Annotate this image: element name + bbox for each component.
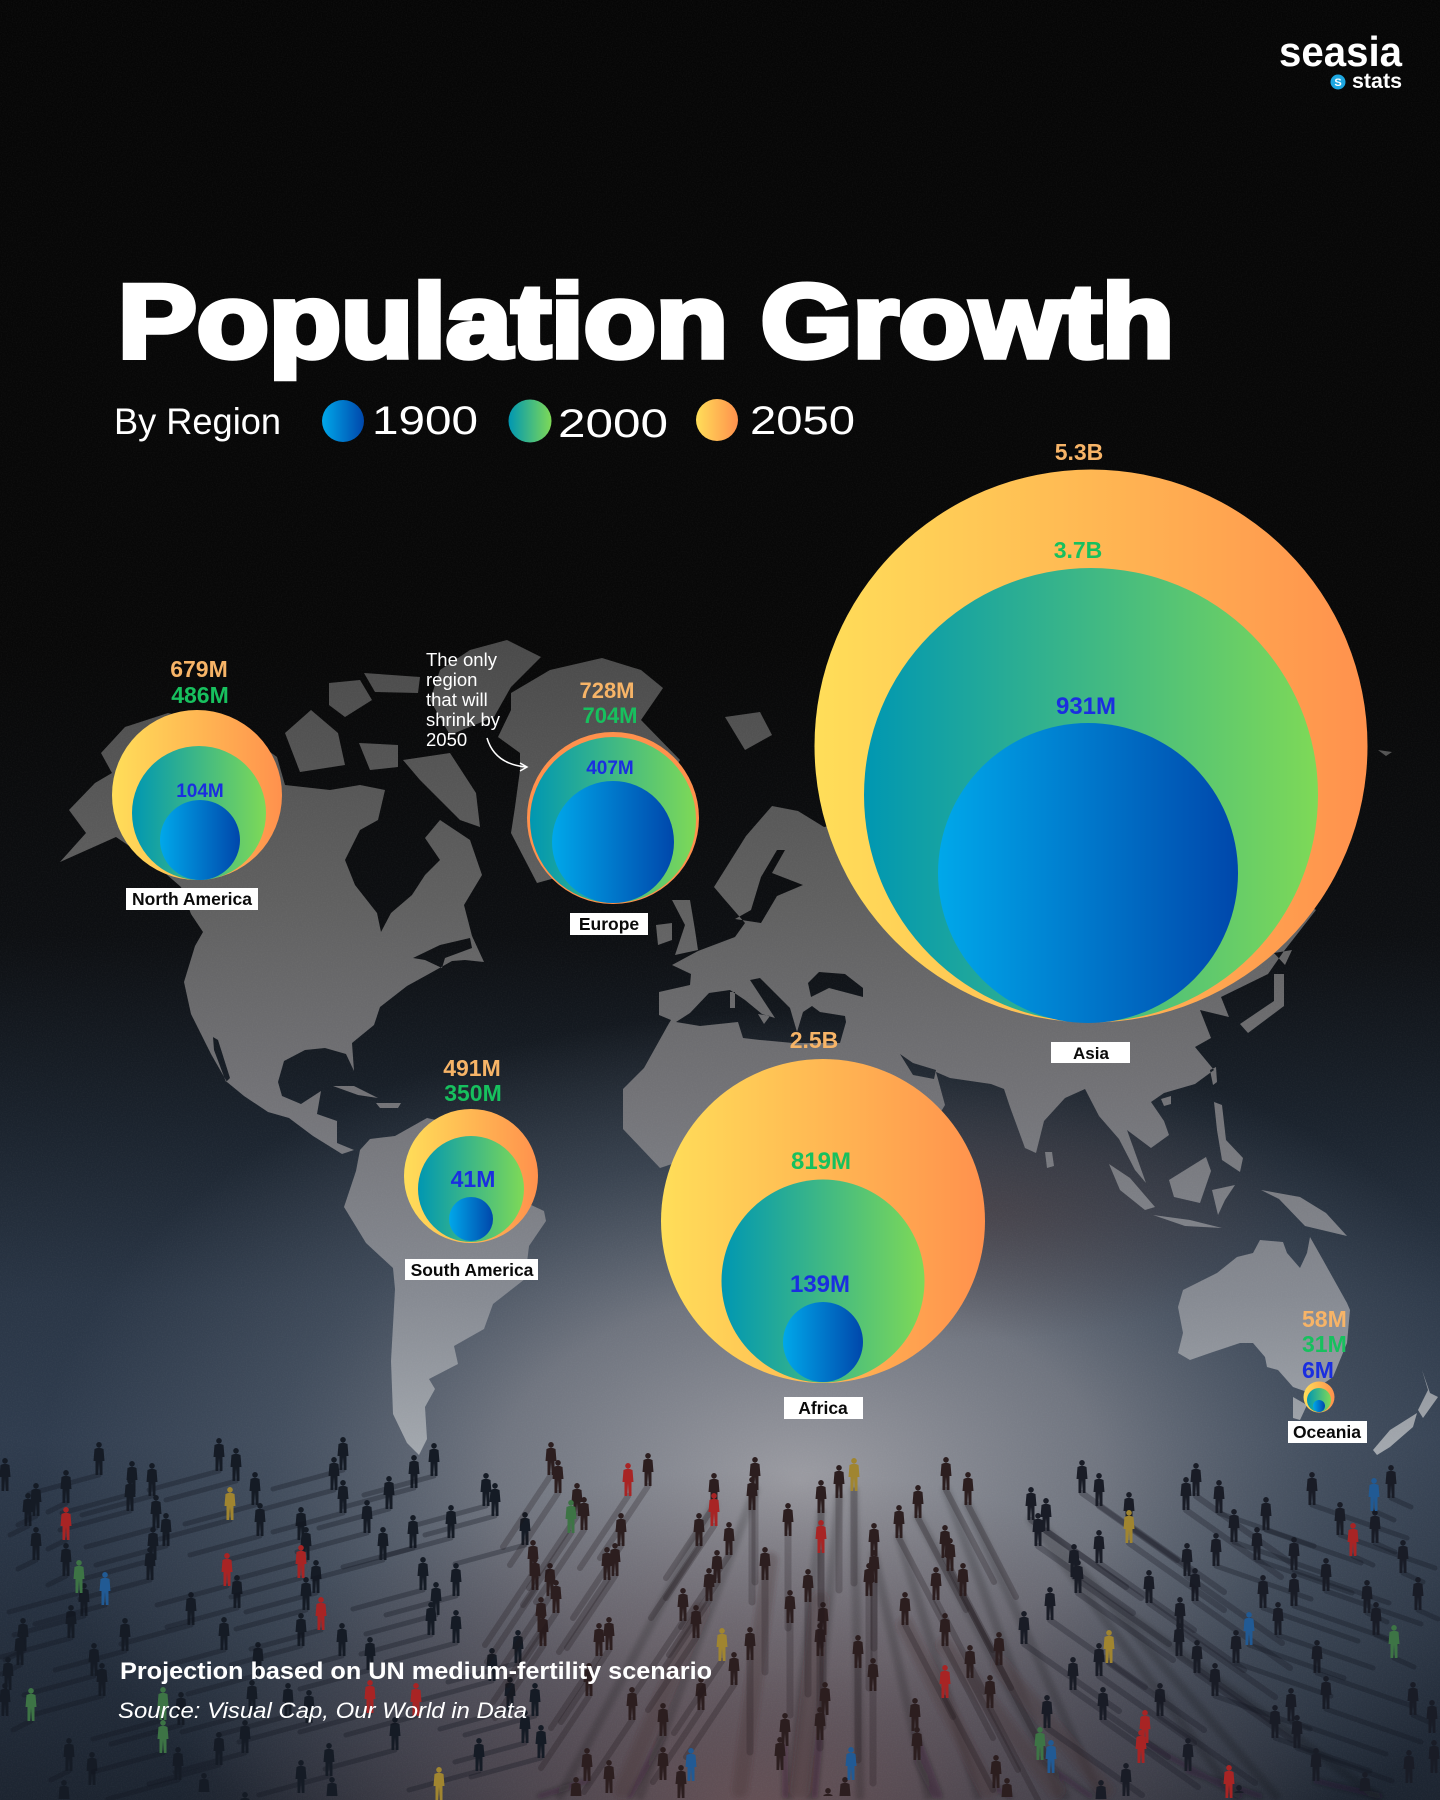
source line: Source: Visual Cap, Our World in Data — [118, 1698, 527, 1723]
legend — [114, 399, 855, 446]
legend: By Region — [114, 401, 281, 442]
panel: North America bubbles: 486M — [171, 682, 229, 708]
panel: Oceania bubbles: 31M — [1302, 1331, 1347, 1357]
panel: Oceania bubbles: 6M — [1302, 1357, 1334, 1383]
panel: South America bubbles: 41M — [451, 1166, 495, 1192]
panel: Europe bubbles: Europe — [579, 914, 639, 934]
panel: Asia bubbles: 5.3B — [1055, 439, 1103, 465]
panel: Asia bubbles — [814, 439, 1368, 1063]
panel: Africa bubbles — [661, 1027, 985, 1419]
panel: South America bubbles — [404, 1055, 538, 1280]
panel: Africa bubbles: 2.5B — [790, 1027, 838, 1053]
callout: only shrinking region: The only — [426, 649, 498, 670]
logo: seasia stats: S — [1334, 77, 1342, 89]
world map — [60, 640, 1438, 1455]
panel: North America bubbles — [112, 656, 282, 910]
crowd of people — [0, 1437, 1440, 1800]
legend: 2000 — [558, 402, 668, 446]
callout: only shrinking region: 2050 — [426, 729, 467, 750]
panel: Europe bubbles: 407M — [586, 758, 634, 779]
legend: 1900 — [372, 399, 478, 443]
callout: only shrinking region: shrink by — [426, 709, 501, 730]
callout: only shrinking region — [426, 649, 527, 771]
legend: 2050 — [750, 399, 855, 443]
title: Population Growth — [118, 264, 1174, 380]
panel: Oceania bubbles: 58M — [1302, 1306, 1347, 1332]
panel: North America bubbles: 679M — [170, 656, 228, 682]
panel: Asia bubbles: 931M — [1056, 693, 1116, 720]
panel: Asia bubbles: Asia — [1073, 1044, 1109, 1063]
logo: seasia stats: seasia — [1279, 28, 1403, 75]
panel: Asia bubbles: 3.7B — [1054, 537, 1102, 563]
panel: North America bubbles: North America — [132, 889, 252, 909]
footnote: projection basis: Projection based on UN medium-fertility scenario — [120, 1658, 712, 1685]
panel: Europe bubbles: 704M — [582, 703, 638, 728]
logo: seasia stats: stats — [1352, 70, 1402, 93]
panel: North America bubbles: 104M — [176, 781, 224, 802]
callout: only shrinking region: that will — [426, 689, 488, 710]
panel: Africa bubbles: 139M — [790, 1271, 850, 1298]
panel: Oceania bubbles — [1288, 1306, 1367, 1443]
arrow — [487, 738, 527, 771]
panel: South America bubbles: 350M — [444, 1080, 502, 1106]
panel: Europe bubbles: 728M — [579, 678, 635, 703]
panel: South America bubbles: 491M — [443, 1055, 501, 1081]
panel: Africa bubbles: Africa — [798, 1398, 848, 1418]
panel: South America bubbles: South America — [411, 1260, 534, 1280]
callout: only shrinking region: region — [426, 669, 477, 690]
panel: Oceania bubbles: Oceania — [1293, 1422, 1361, 1442]
panel: Africa bubbles: 819M — [791, 1148, 851, 1175]
crowd shadows — [540, 1490, 1380, 1796]
panel: Europe bubbles — [527, 678, 699, 935]
